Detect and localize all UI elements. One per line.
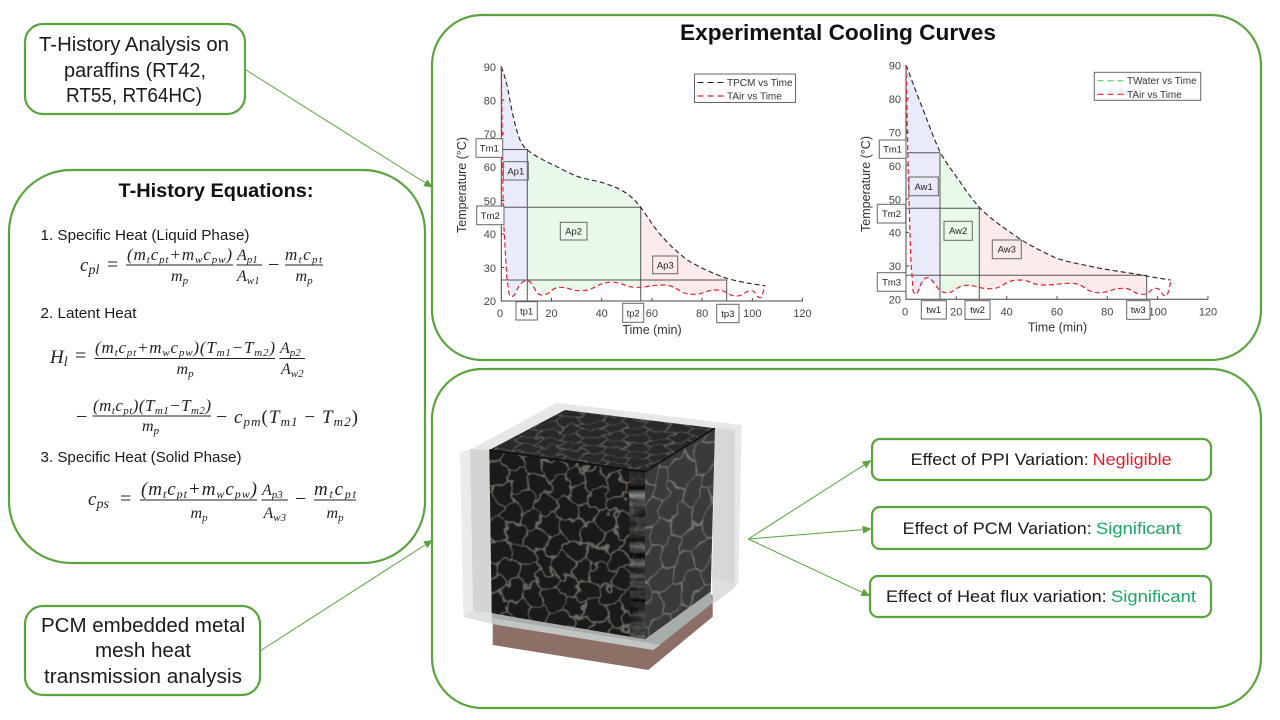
chart: water cooling curve: 80	[889, 94, 901, 106]
box: T-History analysis on paraffins: RT55, RT64HC)	[66, 85, 202, 107]
chart: water cooling curve: TWater vs Time	[1127, 76, 1197, 87]
text: latent heat: 2. Latent Heat	[40, 306, 136, 322]
chart: PCM cooling curve: Ap3	[657, 260, 674, 271]
box: effect of PCM variation	[872, 507, 1211, 549]
chart: PCM cooling curve: tp2	[627, 308, 640, 319]
arrow: T-History analysis to cooling curves	[246, 70, 432, 187]
equation: latent heat: +m	[137, 338, 162, 357]
equation: specific heat liquid: c	[151, 245, 159, 264]
box: effect of PPI variation: Effect of PPI Variation:	[911, 451, 1089, 469]
chart: water cooling curve: tw3	[1131, 305, 1146, 316]
equation: latent heat: m	[142, 418, 154, 435]
equation: latent heat: −T	[232, 338, 255, 357]
chart: PCM cooling curve: 20	[484, 296, 496, 308]
chart: PCM cooling curve: 70	[484, 129, 496, 141]
equation: specific heat solid: m	[314, 479, 328, 500]
equation: specific heat liquid: A	[237, 268, 247, 285]
equation: specific heat liquid: pw	[211, 254, 226, 266]
equation: specific heat solid: −	[295, 488, 306, 510]
chart: water cooling curve: 80	[1101, 307, 1113, 319]
equation: latent heat: t	[115, 347, 119, 359]
chart: water cooling curve: Temperature (°C)	[859, 136, 873, 232]
chart: water cooling curve: Aw2	[949, 226, 967, 237]
equation: specific heat liquid: +m	[169, 245, 194, 264]
box: effect of PPI variation: Negligible	[1093, 451, 1172, 469]
chart: water cooling curve: 60	[889, 161, 901, 173]
equation: specific heat liquid: m	[296, 268, 307, 285]
chart: water cooling curve: 120	[1199, 307, 1217, 319]
chart: water cooling curve: 30	[889, 261, 901, 273]
equation: latent heat: )	[268, 338, 275, 357]
equation: latent heat: H	[50, 347, 64, 368]
chart: water cooling curve: tw2	[970, 305, 985, 316]
chart: PCM cooling curve: 100	[743, 308, 761, 320]
equation: specific heat solid: (m	[141, 479, 162, 500]
equation: specific heat liquid: m	[285, 245, 297, 264]
chart: PCM cooling curve: Temperature (°C)	[455, 137, 469, 233]
equation: latent heat: m1	[281, 414, 298, 429]
chart: water cooling curve: Tm3	[882, 277, 901, 288]
equation: latent heat: c	[118, 338, 126, 357]
equation: specific heat liquid: pt	[158, 254, 170, 266]
equation: specific heat solid: c	[225, 479, 234, 500]
equation: latent heat: )(T	[192, 338, 217, 357]
equation: latent heat: m2	[254, 347, 269, 359]
text: specific heat solid phase: 3. Specific Heat (Solid Phase)	[40, 450, 242, 466]
equation: latent heat: p	[153, 425, 160, 437]
chart: water cooling curve: Time (min)	[1028, 321, 1087, 335]
equation: specific heat liquid: )	[225, 245, 232, 264]
heading: T-History Equations: T-History Equations:	[118, 181, 314, 202]
equation: specific heat liquid: A	[237, 247, 247, 264]
chart: water cooling curve: Aw1	[914, 182, 933, 193]
equation: specific heat liquid: −	[268, 254, 279, 276]
equation: latent heat: m1	[217, 347, 231, 359]
equation: latent heat: (m	[95, 338, 114, 357]
equation: specific heat liquid: p	[306, 275, 313, 287]
equation: specific heat liquid: pl	[87, 263, 99, 278]
chart: water cooling curve: tw1	[926, 305, 941, 316]
equation: specific heat liquid: (m	[127, 245, 146, 264]
chart: PCM cooling curve: TAir vs Time	[727, 92, 782, 102]
equation: specific heat solid: t	[330, 487, 334, 501]
chart: PCM cooling curve: 40	[596, 308, 608, 320]
chart: water cooling curve: Aw3	[998, 245, 1016, 256]
box: effect of heat flux variation	[870, 576, 1211, 617]
equation: specific heat solid: ps	[95, 497, 109, 512]
equation: specific heat solid: t	[163, 487, 167, 501]
box: PCM embedded metal mesh: mesh heat	[95, 640, 191, 662]
equation: latent heat: m1	[155, 405, 169, 417]
equation: specific heat liquid: pt	[311, 254, 323, 266]
heading: Experimental Cooling Curves: Experimental Cooling Curves	[680, 20, 996, 45]
equation: specific heat liquid: w1	[247, 275, 260, 287]
chart: water cooling curve: TAir vs Time	[1127, 90, 1182, 101]
chart: PCM cooling curve	[455, 62, 812, 337]
box: effect of heat flux variation: Effect of Heat flux variation:	[886, 588, 1107, 606]
equation: specific heat liquid: =	[107, 254, 118, 276]
equation: specific heat liquid: t	[299, 254, 303, 266]
equation: latent heat: l	[64, 355, 68, 370]
equation: specific heat solid: m	[326, 505, 338, 522]
equation: specific heat solid: c	[88, 489, 96, 510]
chart: water cooling curve: 90	[889, 60, 901, 72]
panel: metal mesh results	[432, 369, 1261, 708]
equation: latent heat: )	[352, 407, 358, 428]
equation: latent heat	[49, 338, 358, 437]
equation: specific heat liquid: p	[182, 275, 189, 287]
chart: water cooling curve: 100	[1149, 307, 1167, 319]
box: effect of PCM variation: Significant	[1096, 520, 1181, 538]
equation: latent heat: −	[216, 406, 227, 428]
chart: PCM cooling curve: 60	[484, 162, 496, 174]
equation: specific heat solid	[88, 479, 357, 524]
equation: latent heat: =	[75, 345, 86, 367]
chart: water cooling curve: 50	[889, 194, 901, 206]
equation: specific heat solid: c	[335, 479, 344, 500]
chart: PCM cooling curve: 90	[484, 62, 496, 74]
equation: specific heat solid: =	[120, 488, 131, 510]
equation: latent heat: w2	[291, 368, 304, 380]
equation: specific heat solid: A	[264, 505, 273, 522]
equation: specific heat solid: )	[250, 479, 257, 500]
equation: specific heat solid: pw	[234, 487, 250, 501]
equation: specific heat solid: pt	[176, 487, 188, 501]
chart: water cooling curve: 20	[889, 294, 901, 306]
text: specific heat liquid phase: 1. Specific Heat (Liquid Phase)	[40, 228, 250, 244]
chart: PCM cooling curve: 50	[484, 196, 496, 208]
chart: PCM cooling curve: Ap1	[507, 166, 524, 178]
equation: specific heat liquid: t	[147, 254, 151, 266]
box: T-History analysis on paraffins: paraffins (RT42,	[64, 60, 206, 82]
chart: PCM cooling curve: 80	[696, 308, 708, 320]
box: effect of heat flux variation: Significant	[1111, 588, 1196, 606]
equation: specific heat solid: p	[337, 512, 344, 524]
equation: latent heat: pt	[122, 405, 133, 417]
chart: PCM cooling curve: 80	[484, 96, 496, 108]
image: PCM embedded metal mesh cube	[460, 390, 742, 670]
chart: water cooling curve: 70	[889, 128, 901, 140]
equation: latent heat: T	[322, 407, 333, 428]
chart: PCM cooling curve: tp1	[520, 306, 533, 317]
equation: latent heat: p	[187, 368, 194, 380]
equation: latent heat: p2	[289, 347, 301, 359]
equation: latent heat: w	[162, 347, 170, 359]
chart: PCM cooling curve: 40	[484, 229, 496, 241]
chart: water cooling curve	[859, 60, 1217, 335]
equation: latent heat: t	[112, 405, 116, 417]
chart: water cooling curve: 40	[1001, 307, 1013, 319]
chart: PCM cooling curve: Tm2	[481, 211, 500, 222]
panel: experimental cooling curves	[432, 15, 1261, 360]
chart: PCM cooling curve: tp3	[721, 309, 734, 320]
chart: PCM cooling curve: TPCM vs Time	[727, 78, 793, 89]
equation: latent heat: −T	[169, 396, 192, 415]
equation: specific heat solid: c	[167, 479, 176, 500]
equation: specific heat liquid: w	[195, 254, 203, 266]
equation: latent heat: −	[76, 406, 87, 428]
equation: latent heat: m2	[334, 414, 351, 429]
chart: PCM cooling curve: 120	[793, 308, 812, 320]
chart: PCM cooling curve: Ap2	[565, 227, 582, 238]
arrows: mesh cube to effect boxes	[748, 461, 871, 596]
chart: water cooling curve: 40	[889, 228, 901, 240]
equation: specific heat liquid: c	[80, 255, 88, 276]
equation: specific heat liquid: p1	[246, 254, 258, 266]
equation: specific heat solid: A	[262, 482, 272, 499]
chart: PCM cooling curve: 60	[646, 308, 658, 320]
box: T-History analysis on paraffins	[25, 24, 245, 114]
equation: specific heat solid: w	[216, 487, 224, 501]
chart: PCM cooling curve: Tm1	[480, 144, 499, 154]
equation: specific heat liquid: c	[303, 245, 311, 264]
equation: specific heat solid: p3	[271, 489, 283, 501]
equation: latent heat: (m	[93, 396, 111, 415]
chart: water cooling curve: 60	[1051, 307, 1063, 319]
equation: latent heat: m2	[191, 405, 205, 417]
equation: latent heat: c	[234, 407, 242, 428]
chart: PCM cooling curve: 30	[484, 263, 496, 275]
equation: latent heat: T	[269, 407, 279, 428]
box: effect of PPI variation	[872, 439, 1211, 480]
equation: latent heat: )	[204, 396, 211, 415]
equation: latent heat: m	[176, 361, 188, 378]
equation: latent heat: c	[171, 338, 179, 357]
equation: latent heat: −	[299, 407, 321, 428]
equation: latent heat: pt	[126, 347, 137, 359]
equation: latent heat: c	[115, 396, 123, 415]
equation: specific heat liquid: c	[203, 245, 211, 264]
equation: specific heat solid: p	[201, 512, 208, 524]
equation: latent heat: )(T	[132, 396, 156, 415]
chart: water cooling curve: 20	[950, 307, 962, 319]
equation: specific heat liquid: m	[171, 268, 183, 285]
box: PCM embedded metal mesh: PCM embedded metal	[41, 615, 245, 637]
equation: latent heat: (	[262, 407, 268, 428]
chart: water cooling curve: Tm1	[883, 144, 902, 156]
box: PCM embedded metal mesh	[25, 606, 260, 695]
chart: PCM cooling curve: Time (min)	[622, 323, 682, 337]
equation: specific heat solid: w3	[273, 512, 287, 524]
equation: latent heat: A	[280, 340, 290, 357]
equation: latent heat: A	[281, 361, 291, 378]
chart: PCM cooling curve: 20	[545, 308, 558, 320]
equation: specific heat solid: m	[190, 505, 202, 522]
equation: specific heat solid: pt	[344, 487, 357, 501]
arrow: PCM box to mesh panel	[260, 540, 432, 651]
box: PCM embedded metal mesh: transmission analysis	[44, 666, 242, 688]
equation: specific heat liquid	[80, 245, 323, 287]
box: effect of PCM variation: Effect of PCM Variation:	[903, 520, 1092, 538]
panel: T-History equations	[9, 170, 425, 563]
equation: latent heat: pw	[178, 347, 193, 359]
chart: water cooling curve: Tm2	[882, 209, 901, 220]
equation: specific heat solid: +m	[188, 479, 215, 500]
box: T-History analysis on paraffins: T-History Analysis on	[39, 34, 229, 56]
chart: PCM cooling curve: 0	[497, 308, 503, 320]
equation: latent heat: pm	[243, 414, 260, 429]
chart: water cooling curve: 0	[902, 307, 908, 319]
